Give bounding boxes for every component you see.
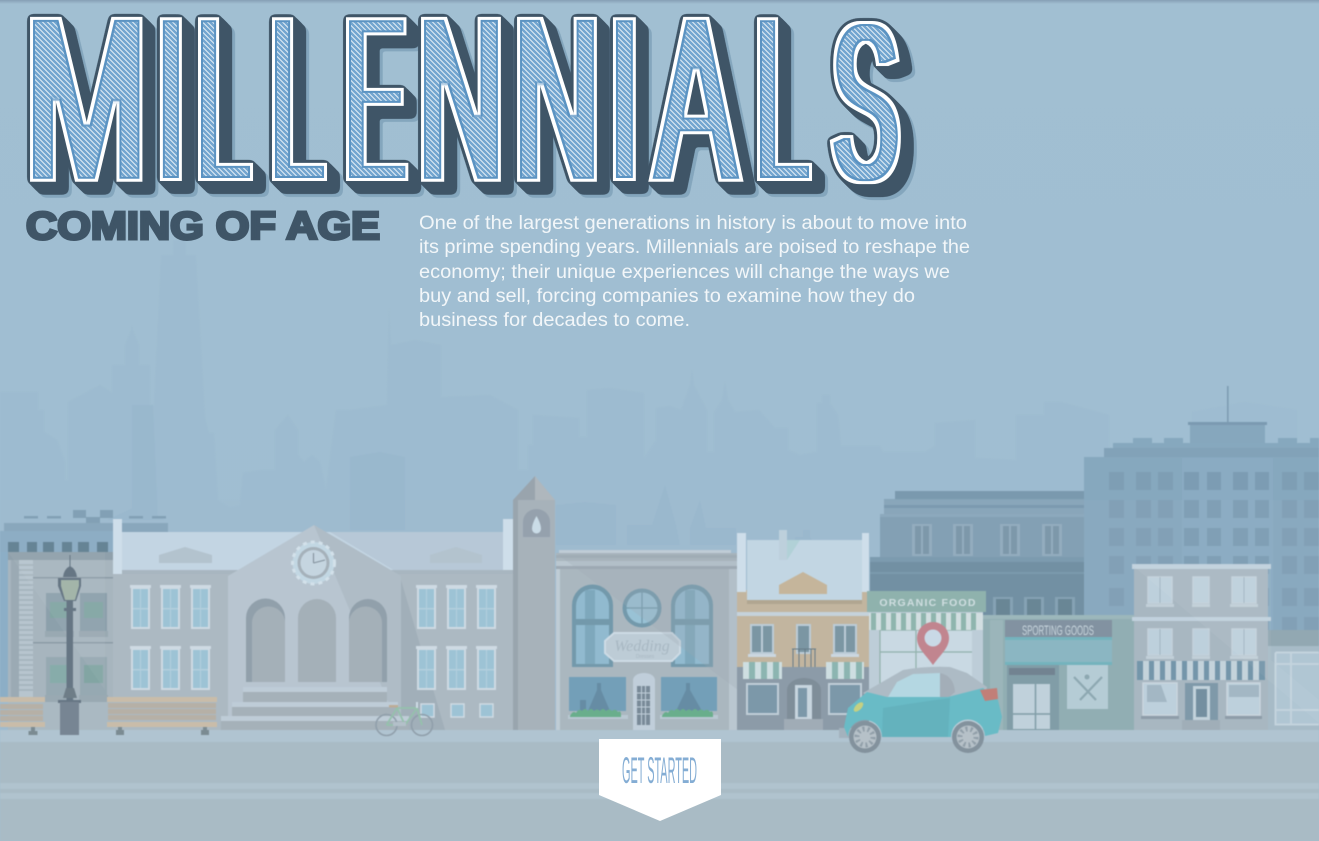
street scene <box>0 240 1319 841</box>
wedding sign: Dresses <box>636 654 655 660</box>
building: far left office block <box>0 510 168 702</box>
portico gable <box>228 525 401 730</box>
portico steps <box>221 687 409 730</box>
shop: tan town house <box>737 530 869 730</box>
shop: far right storefront <box>1268 630 1319 730</box>
arched windows <box>572 584 713 667</box>
intro paragraph: buy and sell, forcing companies to examine how they do <box>419 286 915 307</box>
door <box>1182 683 1220 730</box>
icon: crossed bats poster <box>1067 665 1108 709</box>
car wheels <box>849 721 984 753</box>
portico side shadow <box>314 525 445 730</box>
library windows <box>130 585 497 717</box>
teal car <box>839 667 1002 753</box>
shop: sporting goods <box>983 615 1134 730</box>
title: MILLENNIALS <box>25 0 898 233</box>
portico arches <box>246 598 387 682</box>
building: dark mid-ground office block <box>870 491 1084 617</box>
building: clock tower <box>513 476 555 730</box>
subtitle: COMING OF AGE: COMING OF AGE <box>26 205 380 248</box>
get started button <box>599 739 721 821</box>
shop: three storey grey building <box>1132 564 1319 730</box>
map pin <box>917 622 949 665</box>
intro paragraph: business for decades to come. <box>419 310 690 331</box>
bench: left <box>0 697 45 735</box>
bicycle <box>376 702 432 736</box>
wedding sign <box>605 633 680 661</box>
building: grey row house <box>8 552 114 730</box>
intro paragraph: its prime spending years. Millennials are poised to reshape the <box>419 237 970 258</box>
building: large background tower <box>1084 386 1319 708</box>
haze over the scene <box>0 500 1319 841</box>
shop: wedding dresses <box>556 550 738 730</box>
wedding sign: Wedding <box>614 638 670 655</box>
street lamp <box>58 555 81 735</box>
top edge band <box>0 0 1319 4</box>
intro paragraph <box>419 213 970 331</box>
skyline: distant city silhouette <box>0 240 1319 841</box>
text: GET STARTED <box>622 750 697 791</box>
sporting goods sign <box>1005 620 1112 638</box>
building: library with clock <box>113 519 513 730</box>
striped awning <box>869 613 983 630</box>
sporting goods sign: SPORTING GOODS <box>1022 622 1094 638</box>
shop: organic food <box>867 591 986 730</box>
intro paragraph: economy; their unique experiences will change the ways we <box>419 262 950 283</box>
store windows <box>568 677 718 719</box>
icon: roof dormers <box>159 547 482 563</box>
striped awning <box>1137 661 1265 680</box>
organic food sign: ORGANIC FOOD <box>879 597 977 609</box>
street: sidewalk and road <box>0 730 1319 841</box>
awnings <box>743 662 864 679</box>
lower windows and door <box>746 683 862 730</box>
bench: right <box>107 697 217 735</box>
double door <box>1013 684 1050 729</box>
shop door <box>633 673 655 730</box>
icon: clock <box>292 542 334 584</box>
intro paragraph: One of the largest generations in history is about to move into <box>419 213 967 234</box>
